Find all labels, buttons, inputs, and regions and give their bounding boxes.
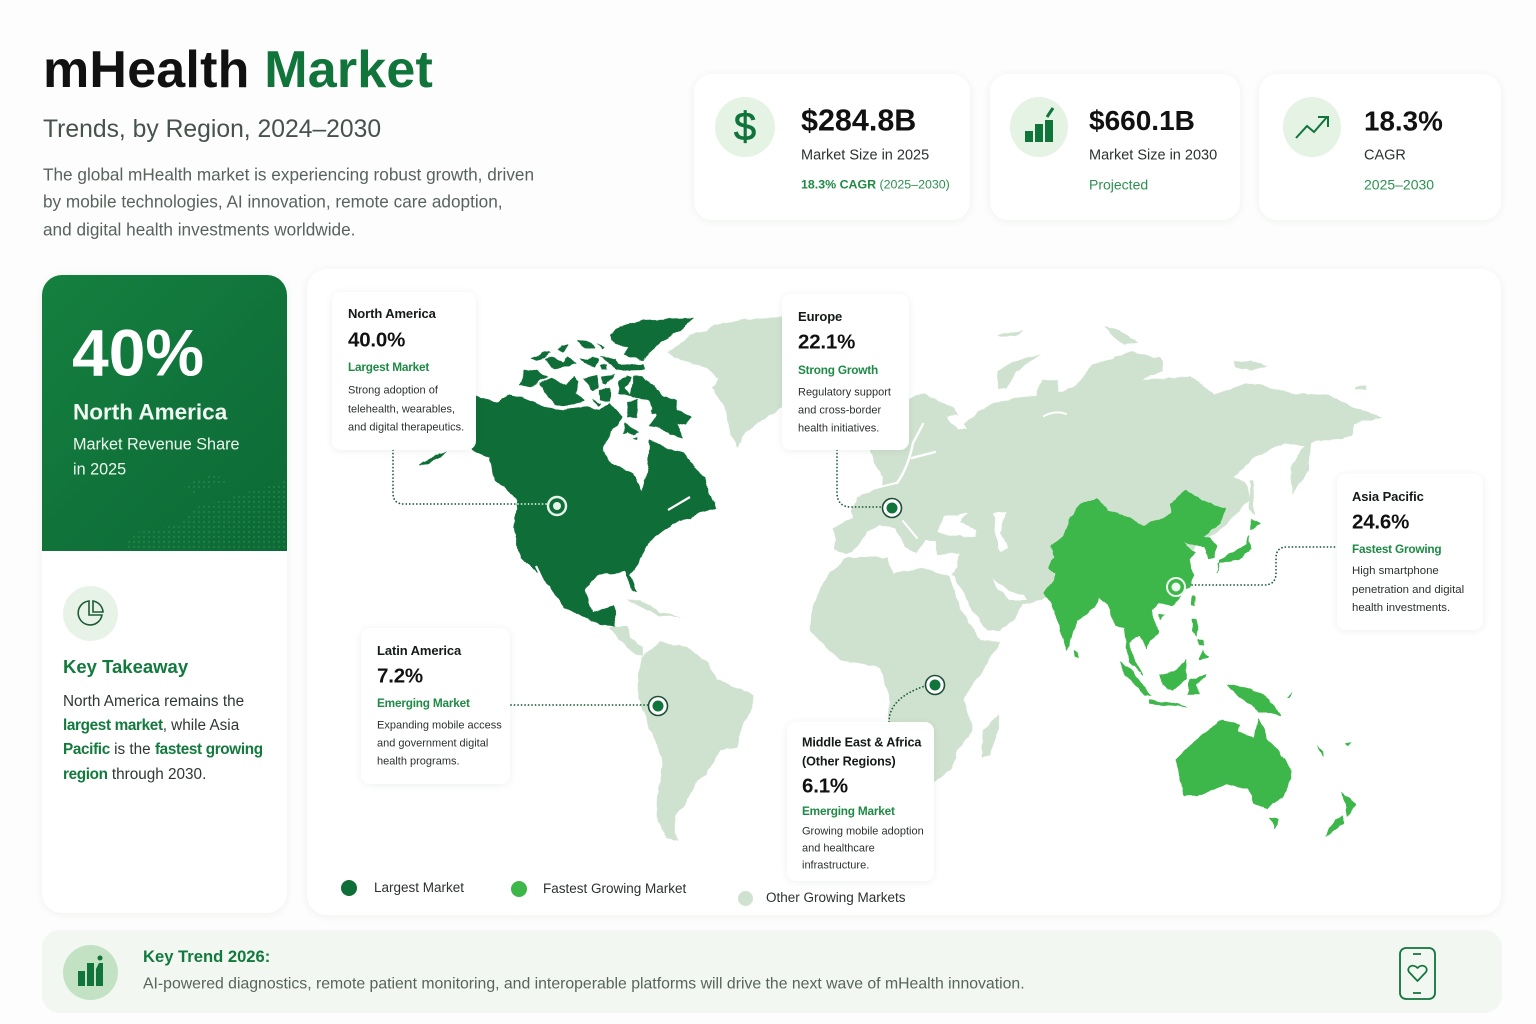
share caption: Market Revenue Share [73,435,239,453]
status: Largest Market [348,360,429,374]
region: (Other Regions) [802,754,896,768]
description: Regulatory support [798,386,891,398]
value: $660.1B [1089,105,1195,136]
map: asia pacific fastest growing [1044,491,1356,836]
status: Emerging Market [377,696,470,710]
pin: asia pacific [1167,578,1185,596]
connector: asia pacific [1192,547,1337,585]
key takeaway text [63,693,263,783]
description: health investments. [1352,602,1450,614]
label: CAGR [1364,147,1406,163]
map: north america largest market [419,318,716,627]
caribbean [628,600,680,618]
description: health programs. [377,755,460,767]
icon: pie chart [63,586,118,641]
legend label: other markets: Other Growing Markets [766,890,906,905]
legend label: fastest growing: Fastest Growing Market [543,881,686,896]
key takeaway heading: Key Takeaway [63,656,188,677]
icon: dollar [715,97,775,157]
legend dot: largest market [341,880,357,896]
connector: north america inner [518,503,548,505]
region: Middle East & Africa [802,735,921,749]
stat card: CAGR [1259,74,1501,220]
share caption [73,435,239,478]
description: penetration and digital [1352,584,1464,596]
caspian sea [993,512,1008,552]
region: North America [348,306,436,321]
black sea [938,513,977,537]
philippines [1192,620,1209,659]
status: Strong Growth [798,363,878,377]
white sea [947,415,967,430]
description: and healthcare [802,842,875,854]
region [802,735,922,768]
description: and cross-border [798,404,881,416]
legend label: largest market: Largest Market [374,880,464,895]
icon: bar chart [1010,97,1068,157]
title: mHealth Market [43,41,433,99]
key trend text: AI-powered diagnostics, remote patient monitoring, and interoperable platforms will drive the next wave of mHealth innovation. [143,976,1025,993]
description [348,384,464,433]
icon: phone with heart [1399,947,1436,1000]
status: Fastest Growing [1352,542,1441,556]
new zealand [1326,793,1356,836]
connector: europe [837,450,882,507]
icon: growth bars [63,945,118,1000]
share caption: in 2025 [73,460,126,478]
map: other growing markets [610,317,1381,840]
alaska tail [419,452,446,465]
mediterranean [835,524,960,575]
subtitle: Trends, by Region, 2024–2030 [43,116,381,143]
taiwan hainan sri lanka [1074,595,1195,658]
callout: north america [332,292,476,450]
note: Projected [1089,177,1148,193]
description: telehealth, wearables, [348,403,455,415]
panel: world map [307,269,1501,915]
callout: asia pacific [1337,474,1483,630]
share: 6.1% [802,775,848,798]
stat card: market size 2030 [990,74,1240,220]
share: 24.6% [1352,511,1409,534]
intro text: by mobile technologies, AI innovation, remote care adoption, [43,192,503,212]
icon: dollar: $ [734,105,756,149]
description: High smartphone [1352,565,1439,577]
ob gulf [1044,412,1066,416]
greenland [667,317,785,448]
description [798,386,891,434]
skagerrak [872,483,896,489]
intro text: The global mHealth market is experiencing robust growth, driven [43,165,534,185]
legend [341,880,906,906]
description: and digital therapeutics. [348,421,464,433]
region: Europe [798,309,842,324]
description: Growing mobile adoption [802,825,924,837]
persian gulf [993,578,1027,600]
arctic archipelago [520,318,693,439]
connector: latin america [511,704,648,706]
callout: middle east and africa [787,722,934,881]
connector: middle east and africa [889,686,925,722]
sumatra java [1119,661,1186,707]
region name: North America [73,400,227,424]
new guinea [1226,684,1351,756]
header [43,41,534,240]
china india southeast asia [1044,491,1226,675]
description: infrastructure. [802,859,869,871]
pin: europe [882,498,902,518]
description: health initiatives. [798,422,879,434]
central america [610,627,642,655]
gulf of california and st lawrence [536,497,690,600]
green highlight block [42,275,287,551]
stat card: market size 2025 [694,74,970,220]
key takeaway text: Pacific is the fastest growing [63,741,263,758]
label: Market Size in 2025 [801,147,929,163]
legend dot: other markets [738,891,753,906]
description: and government digital [377,737,488,749]
region: Latin America [377,643,461,658]
mainland [470,395,716,627]
description: Strong adoption of [348,384,438,396]
share: 22.1% [798,331,855,354]
key takeaway text: largest market, while Asia [63,717,239,734]
value: $284.8B [801,104,916,138]
tasmania [1270,818,1279,828]
baltic sea [897,424,935,483]
south america [638,642,753,840]
seas [835,415,1027,642]
description: Expanding mobile access [377,719,502,731]
key trend heading: Key Trend 2026: [143,947,270,966]
pin: middle east and africa [926,676,944,694]
pin: latin america [648,696,668,716]
red sea and gulf of aden [949,575,1003,642]
note: 18.3% CAGR (2025–2030) [801,178,950,192]
region: Asia Pacific [1352,489,1424,504]
pin: north america [548,497,566,515]
key takeaway text: region through 2030. [63,766,206,783]
icon: trend line [1283,97,1341,157]
description [1352,565,1464,614]
australia [1176,718,1292,809]
intro text [43,165,534,240]
key takeaway text: North America remains the [63,693,244,710]
borneo sulawesi [1160,659,1206,695]
banner: key trend 2026 [42,930,1502,1013]
description [802,825,924,871]
description [377,719,502,767]
madagascar [982,715,999,757]
label: Market Size in 2030 [1089,147,1217,163]
status: Emerging Market [802,804,895,818]
sakhalin [1250,480,1254,514]
callout: europe [782,294,909,450]
africa [810,553,1000,813]
panel: north america highlight and key takeaway [42,275,287,913]
callout: latin america [361,628,510,784]
japan [1217,519,1261,573]
legend dot: fastest growing [511,881,527,897]
connector: north america [393,450,516,504]
big percentage: 40% [72,315,204,389]
adriatic [903,521,917,538]
intro text: and digital health investments worldwide. [43,220,355,240]
share: 7.2% [377,665,423,688]
share: 40.0% [348,329,405,352]
note: 2025–2030 [1364,177,1434,193]
value: 18.3% [1364,105,1443,136]
arctic islands [997,355,1040,389]
eurasia [834,352,1381,636]
